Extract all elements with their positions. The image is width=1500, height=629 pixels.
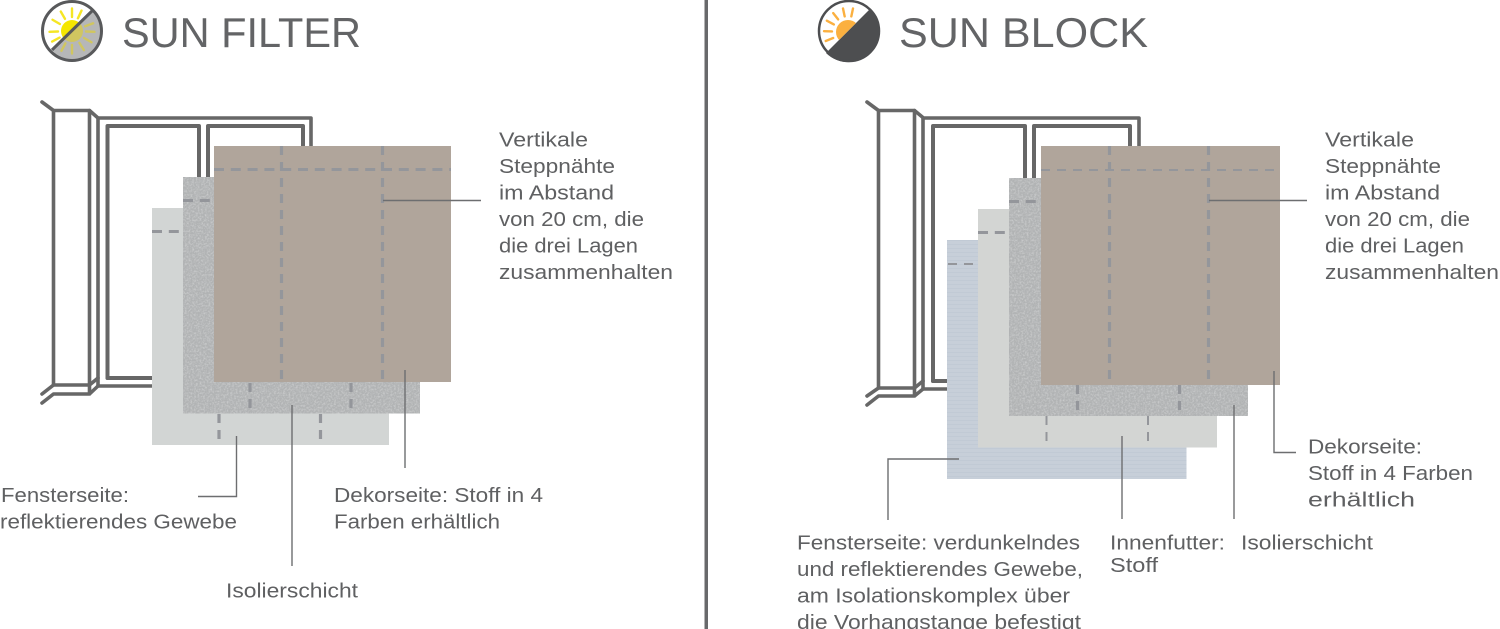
panel: sun filter [0,2,673,602]
label: vertical quilting seams: Steppnähte [499,155,615,178]
label: decorative side: erhältlich [1308,488,1415,512]
label: vertical quilting seams: Steppnähte [1325,155,1441,178]
label: insulation: Isolierschicht [226,580,358,602]
label: vertical quilting seams: im Abstand [499,182,614,204]
label: window side: Fensterseite: [1,484,129,507]
leader lines [888,200,1307,520]
label: inner lining [1110,532,1225,577]
fabric layer: inner lining [978,209,1217,448]
label: decorative side: Farben erhältlich [334,510,500,534]
label: window side: Fensterseite: verdunkelndes [797,532,1080,554]
label: decorative side: Stoff in 4 Farben [1308,462,1473,485]
fabric layer: reflective fabric [152,208,389,445]
label: vertical quilting seams: im Abstand [1325,182,1440,204]
heading: sun block: SUN BLOCK [899,9,1148,56]
label: decorative side [1308,436,1473,512]
icon: sun block [818,0,880,62]
panel: sun block [797,0,1499,629]
fabric layer: insulation [183,177,420,414]
label: inner lining: Innenfutter: [1110,532,1225,554]
label: decorative side [334,484,543,534]
leader lines [198,200,481,566]
heading: sun filter: SUN FILTER [122,9,361,56]
label: window side: am Isolationskomplex über [797,584,1070,608]
label: inner lining: Stoff [1110,554,1158,577]
label: vertical quilting seams: von 20 cm, die [1325,208,1470,231]
label: vertical quilting seams [499,128,673,284]
label: vertical quilting seams: Vertikale [1325,128,1414,152]
fabric layer: insulation [1009,178,1248,416]
fabric layer: decorative fabric [214,146,451,382]
label: decorative side: Dekorseite: Stoff in 4 [334,484,543,507]
label: vertical quilting seams: die drei Lagen [499,234,638,258]
fabric layer: blackout fabric [947,240,1186,479]
window frame [867,102,1139,405]
label: vertical quilting seams: die drei Lagen [1325,234,1464,258]
label: window side [797,532,1083,629]
label: vertical quilting seams: Vertikale [499,128,588,152]
label: vertical quilting seams [1325,128,1499,284]
label: window side: reflektierendes Gewebe [0,510,237,534]
label: vertical quilting seams: von 20 cm, die [499,208,644,231]
fabric layer: decorative fabric [1041,146,1280,385]
label: vertical quilting seams: zusammenhalten [499,261,673,284]
window frame [42,102,311,403]
label: vertical quilting seams: zusammenhalten [1325,261,1499,284]
icon: sun filter [41,0,103,62]
label: window side: und reflektierendes Gewebe, [797,558,1083,581]
label: window side [0,484,237,534]
label: decorative side: Dekorseite: [1308,436,1422,458]
divider between Sun Filter and Sun Block [704,0,708,629]
label: insulation: Isolierschicht [1241,532,1373,554]
